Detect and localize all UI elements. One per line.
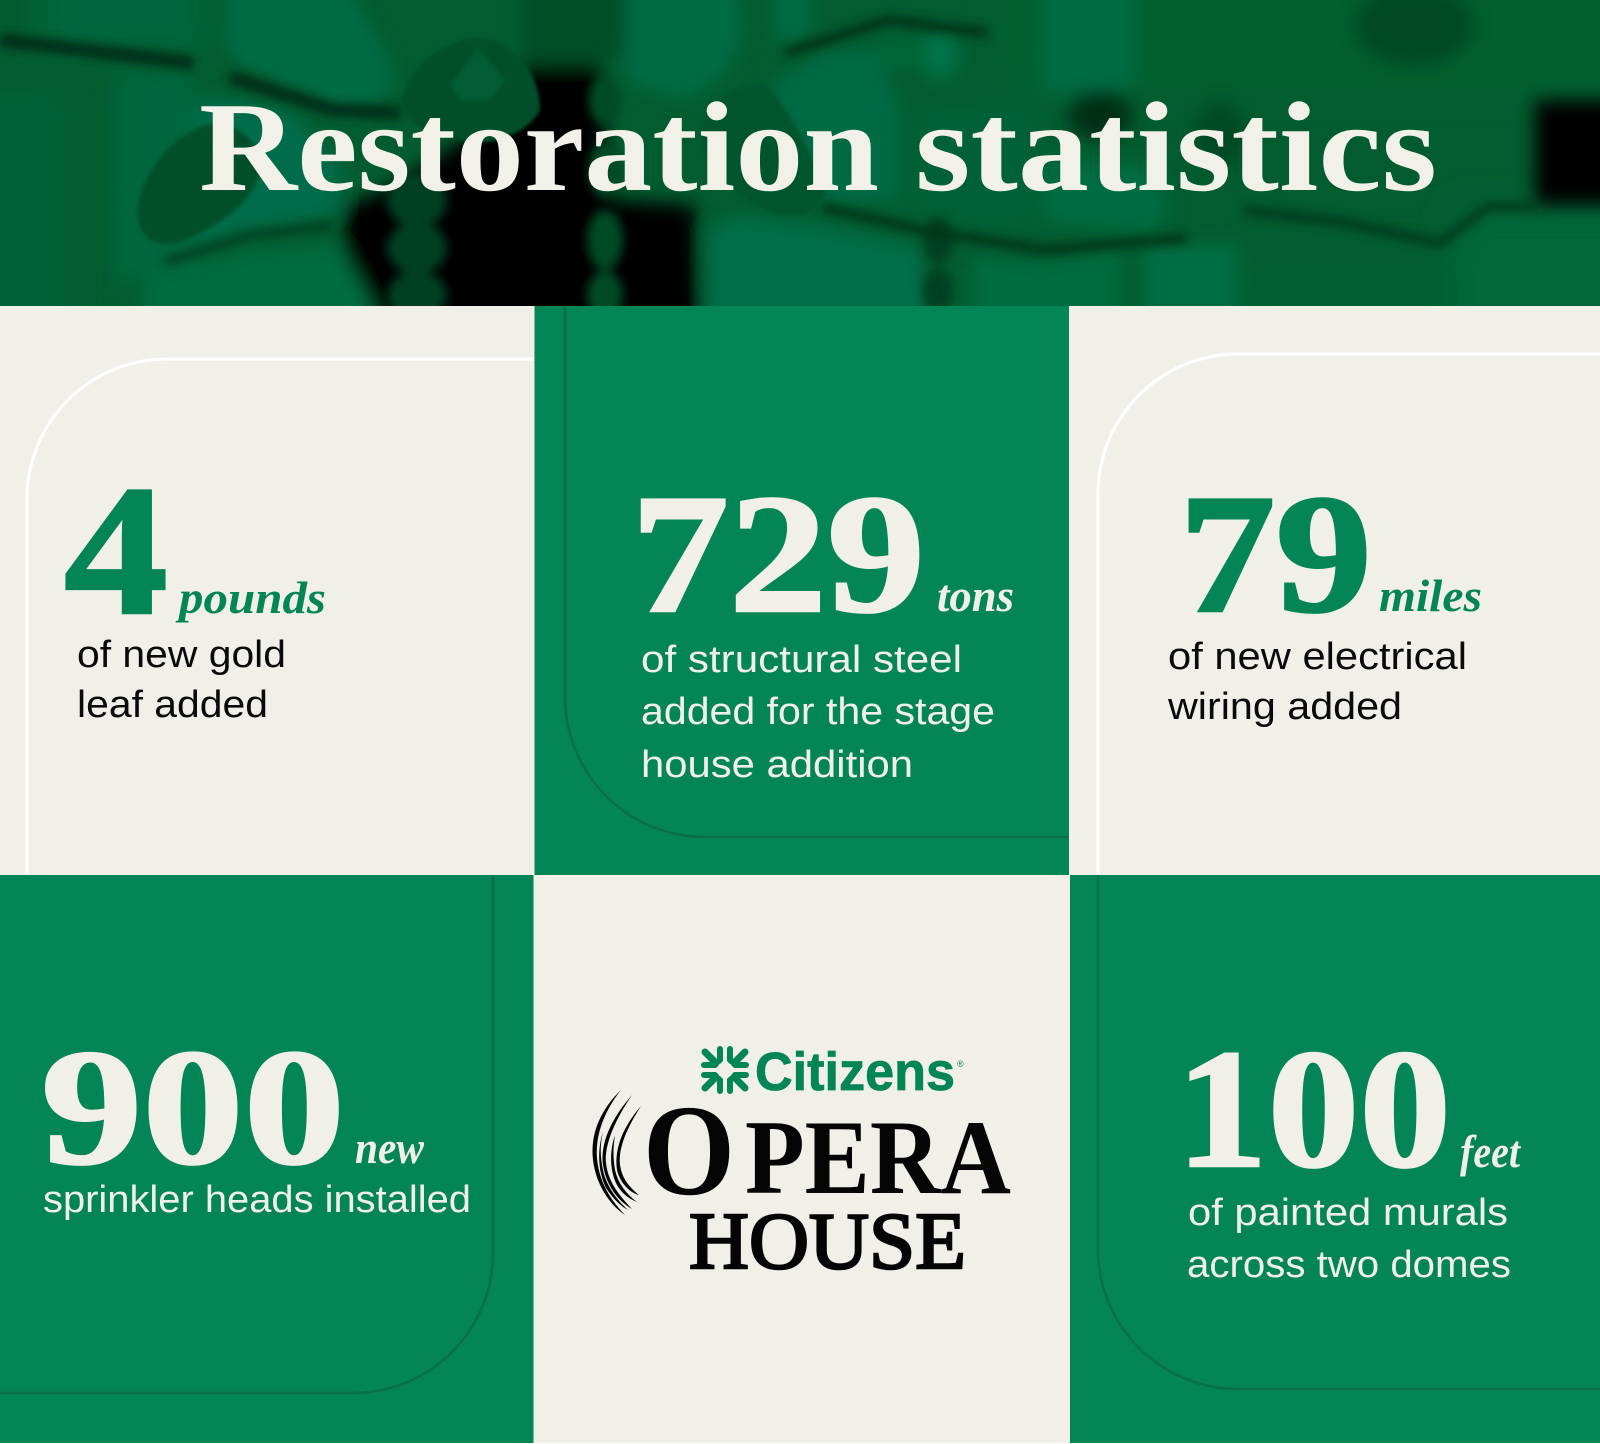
panel: 79 miles of wiring	[1069, 306, 1600, 875]
panel: 4 pounds of gold leaf	[0, 306, 534, 875]
description: structural steel: house addition	[641, 744, 913, 786]
description: gold leaf: of new gold	[77, 634, 286, 676]
unit: pounds: pounds	[175, 572, 326, 623]
stat number: 729: 729	[631, 460, 925, 648]
panel: 100 feet of murals	[1070, 875, 1600, 1443]
description: painted murals: across two domes	[1187, 1244, 1511, 1286]
gem: centre crystal	[702, 84, 825, 216]
beads: hanging crystal strand	[387, 172, 447, 319]
panel: 729 tons of steel	[534, 306, 1069, 875]
beads: centre crystal strand	[587, 76, 623, 319]
gem: lower left crystal	[137, 124, 262, 244]
gem: upper crystal	[402, 38, 540, 142]
description: gold leaf: leaf added	[77, 684, 268, 726]
stat number: 79: 79	[1179, 460, 1372, 648]
unit: new: new	[355, 1122, 424, 1173]
logo text: House: HOUSE	[689, 1198, 966, 1286]
stat number: 4: 4	[64, 448, 168, 654]
panel: Citizens Opera House logo	[534, 875, 1070, 1443]
description: sprinkler heads: sprinkler heads installed	[43, 1179, 471, 1221]
description: structural steel: of structural steel	[641, 639, 962, 681]
logo icon: Citizens mark	[704, 1049, 746, 1091]
description: electrical wiring: of new electrical	[1168, 636, 1467, 678]
stat number: 900: 900	[41, 1015, 345, 1199]
unit: miles: miles	[1379, 570, 1482, 621]
description: structural steel: added for the stage	[641, 691, 995, 733]
panel: 900 sprinkler heads	[0, 875, 534, 1443]
stat number: 100: 100	[1176, 1015, 1451, 1203]
hero banner: blurred green chandelier photo	[0, 0, 1600, 306]
title: statistics	[915, 76, 1437, 218]
logo icon: curved swoosh lines	[592, 1090, 641, 1215]
description: electrical wiring: wiring added	[1167, 686, 1402, 728]
unit: feet: feet	[1460, 1126, 1521, 1177]
description: painted murals: of painted murals	[1188, 1192, 1508, 1234]
title: Restoration	[199, 76, 879, 218]
unit: tons: tons	[937, 570, 1014, 621]
logo text: Citizens: Citizens	[755, 1042, 955, 1102]
logo text: Opera: PERA	[745, 1099, 1011, 1216]
logo text: Opera: O	[643, 1079, 735, 1223]
logo mark: registered: ®	[957, 1059, 964, 1069]
